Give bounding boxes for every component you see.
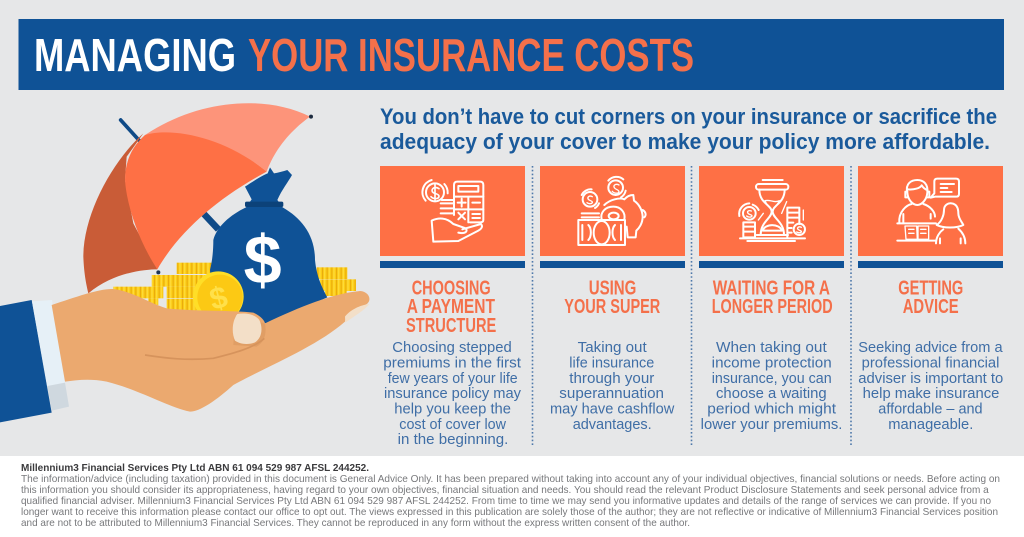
body text: through your [569, 371, 654, 387]
heading: ADVICE [903, 296, 959, 318]
body text: advantages. [573, 417, 652, 433]
divider bar [540, 261, 685, 268]
body text: When taking out [716, 340, 827, 356]
panel: waiting for a longer period [699, 166, 844, 433]
icon panel: hourglass and coins [699, 166, 844, 256]
heading: YOUR SUPER [564, 296, 661, 318]
heading: WAITING FOR A [713, 278, 830, 300]
body text: lower your premiums. [701, 417, 842, 433]
body text: superannuation [559, 386, 664, 402]
divider bar [380, 261, 525, 268]
footer disclaimer: longer want to receive this information please contact our office to opt out. The views expressed in this publication are solely those of the author; they are not reflective or indicative of Millennium3 Financial Services position [21, 507, 998, 518]
body text [383, 340, 522, 448]
body text: help make insurance [863, 386, 999, 402]
body text: adviser is important to [858, 371, 1003, 387]
body text [550, 340, 675, 433]
heading [898, 278, 963, 318]
body text: premiums in the first [383, 355, 521, 371]
panel: choosing a payment structure [380, 166, 525, 448]
body text: Taking out [578, 340, 647, 356]
heading [564, 278, 661, 318]
heading: LONGER PERIOD [712, 296, 833, 318]
footer disclaimer: and are not to be attributed to Millennium3 Financial Services. They cannot be reproduced in any form without the express written consent of the author. [21, 518, 690, 529]
column separators [532, 166, 851, 445]
footer disclaimer: Millennium3 Financial Services Pty Ltd ABN 61 094 529 987 AFSL 244252. [21, 462, 369, 474]
body text: income protection [712, 355, 832, 371]
money bag: $ [244, 222, 282, 298]
shirt sleeve and cuff [0, 300, 69, 422]
body text: cost of cover low [399, 417, 506, 433]
body text: Choosing stepped [392, 340, 512, 356]
heading: STRUCTURE [406, 315, 496, 337]
body text [701, 340, 842, 433]
intro statement: adequacy of your cover to make your policy more affordable. [380, 129, 990, 154]
body text: help you keep the [394, 402, 511, 418]
body text: may have cashflow [550, 402, 675, 418]
icon panel: adviser and client [858, 166, 1003, 256]
divider bar [858, 261, 1003, 268]
footer disclaimer: qualified financial adviser. Millennium3 Financial Services Pty Ltd ABN 61 094 529 987 AFSL 244252. From time to time we may send you informative updates and details of the range of services we can provide. If you no [21, 496, 991, 507]
heading [712, 278, 833, 318]
heading [406, 278, 496, 337]
heading: USING [589, 278, 636, 300]
title banner: YOUR INSURANCE COSTS [248, 29, 694, 81]
icon panel: calculator and hand [380, 166, 525, 256]
footer disclaimer: The information/advice (including taxation) provided in this document is General Advice Only. It has been prepared without taking into account any of your individual objectives, financial solutions or needs. Before acting on [21, 474, 1000, 485]
umbrella [83, 103, 313, 293]
body text: choose a waiting [716, 386, 827, 402]
hand [52, 289, 369, 412]
heading: CHOOSING [412, 278, 491, 300]
body text: insurance, you can [712, 371, 832, 387]
heading: A PAYMENT [407, 296, 495, 318]
illustration: hand holding umbrella over money bag [0, 103, 369, 422]
gold coin: $ [206, 280, 231, 317]
divider bar [699, 261, 844, 268]
body text: few years of your life [388, 371, 518, 387]
body text: period which might [707, 402, 836, 418]
gold coin stacks [113, 263, 356, 311]
intro statement [380, 104, 997, 154]
money bag [210, 167, 327, 323]
body text: life insurance [569, 355, 654, 371]
body text: in the beginning. [398, 432, 508, 448]
footer disclaimer [0, 456, 1024, 537]
title banner [18, 19, 1004, 90]
body text: affordable – and [878, 402, 983, 418]
body text: Seeking advice from a [858, 340, 1003, 356]
body text: professional financial [862, 355, 999, 371]
body text: manageable. [888, 417, 973, 433]
icon panel: piggy bank and money [540, 166, 685, 256]
panel: using your super [540, 166, 685, 433]
body text [858, 340, 1003, 433]
panel: getting advice [858, 166, 1003, 433]
gold coin [193, 271, 244, 322]
footer disclaimer: this information you should consider its appropriateness, having regard to your own objectives, financial situation and needs. You should read the relevant Product Disclosure Statements and seek personal advice from a [21, 485, 989, 496]
title banner: MANAGING [34, 29, 236, 81]
body text: insurance policy may [384, 386, 522, 402]
heading: GETTING [898, 278, 963, 300]
